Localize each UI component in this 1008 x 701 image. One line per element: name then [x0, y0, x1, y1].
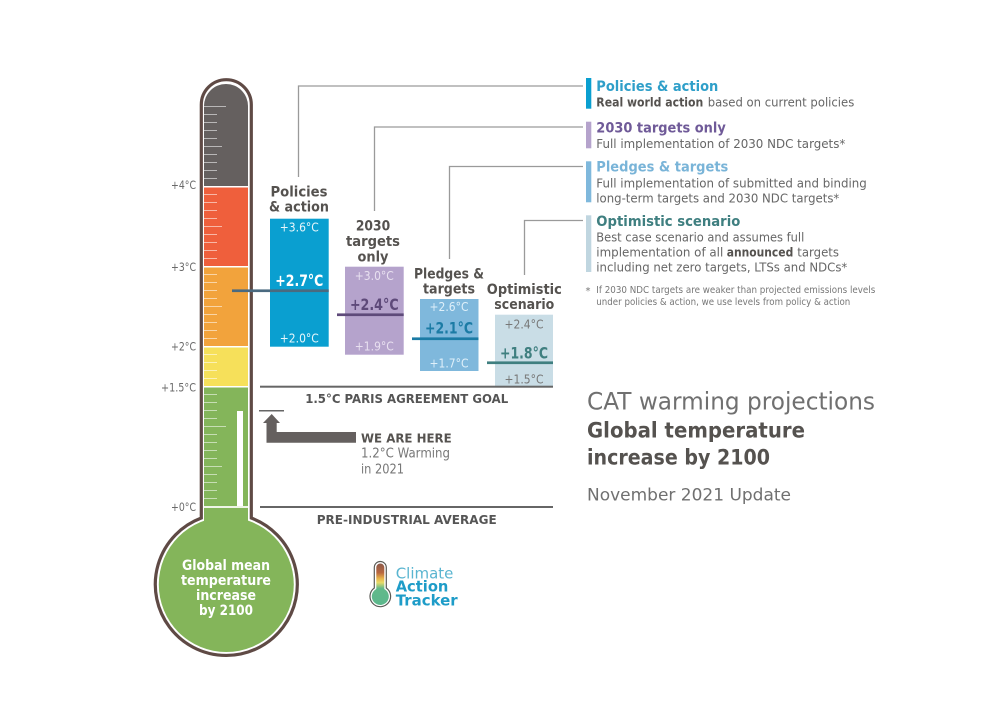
footnote: *	[586, 286, 590, 297]
scale labels: +3°C	[171, 260, 196, 274]
legend: pledges and targets	[586, 160, 867, 205]
legend: optimistic scenario: Best case scenario and assumes full	[596, 230, 804, 245]
legend: policies and action	[586, 78, 854, 110]
label	[487, 282, 562, 313]
range box	[270, 219, 329, 347]
legend: 2030 targets only	[586, 121, 845, 151]
scenario: optimistic	[487, 282, 562, 387]
label: targets	[346, 234, 400, 250]
we are here marker: in 2021	[361, 462, 404, 477]
scenario: pledges and targets: +1.7°C	[430, 355, 469, 370]
label: 2030	[356, 219, 390, 235]
logo text: Climate	[396, 564, 453, 582]
marker line	[232, 289, 329, 292]
scenario: 2030 targets only: +1.9°C	[355, 338, 394, 353]
scale labels	[161, 178, 196, 514]
bulb label: by 2100	[199, 603, 253, 619]
title block: Global temperature	[587, 418, 805, 442]
legend: optimistic scenario: implementation of all	[596, 245, 723, 260]
label: only	[358, 249, 389, 265]
label	[414, 266, 484, 297]
bulb label: Global mean	[182, 558, 270, 574]
legend: optimistic scenario	[586, 214, 847, 275]
label	[269, 185, 329, 215]
range box	[495, 315, 553, 387]
we are here marker	[259, 410, 452, 477]
legend: optimistic scenario: including net zero targets, LTSs and NDCs*	[596, 260, 847, 275]
legend: policies and action: Real world action	[596, 96, 703, 110]
logo text	[396, 564, 458, 610]
bulb label: increase	[196, 588, 256, 604]
level line	[259, 410, 284, 412]
logo text: Action	[396, 578, 448, 596]
title block: CAT warming projections	[587, 387, 875, 415]
values: +3.0°C	[355, 268, 394, 283]
values: +2.4°C	[504, 316, 544, 331]
scenario: policies and action	[232, 185, 329, 347]
pre-industrial line and label: PRE-INDUSTRIAL AVERAGE	[317, 512, 497, 527]
thermometer outline	[155, 80, 297, 655]
legend: optimistic scenario: targets	[797, 245, 839, 260]
range box	[420, 299, 478, 371]
label: & action	[269, 199, 329, 215]
legend: optimistic scenario: announced	[727, 246, 793, 260]
logo text: Tracker	[396, 592, 458, 610]
label: Optimistic	[487, 282, 562, 298]
legend: policies and action: based on current policies	[708, 95, 854, 110]
values: +2.0°C	[280, 330, 319, 345]
values: +2.6°C	[430, 299, 469, 314]
footnote: under policies & action, we use levels from policy & action	[596, 297, 850, 308]
marker line	[337, 313, 404, 316]
legend: pledges and targets: Full implementation of submitted and binding	[596, 175, 867, 190]
legend: pledges and targets: Pledges & targets	[596, 160, 728, 176]
logo: Climate Action Tracker	[370, 562, 458, 610]
label	[346, 219, 400, 265]
scale labels: +2°C	[171, 340, 196, 354]
legend: 2030 targets only: Full implementation of 2030 NDC targets*	[596, 136, 845, 151]
temperature colour bands	[204, 80, 248, 530]
scenario: pledges and targets	[412, 266, 484, 371]
connector lines	[298, 86, 583, 275]
marker line	[487, 361, 553, 364]
legend: policies and action: Policies & action	[596, 79, 718, 95]
label: Policies	[270, 185, 328, 201]
scale labels: +4°C	[171, 178, 196, 192]
zero line	[204, 506, 248, 508]
label: Pledges &	[414, 266, 484, 282]
arrow	[263, 414, 356, 443]
scenario: optimistic: +1.8°C	[500, 343, 548, 362]
text: WE ARE HERE	[361, 430, 452, 445]
bulb label	[181, 558, 271, 619]
footnote	[586, 285, 875, 308]
current warming bar	[237, 411, 243, 507]
Paris goal line and label: 1.5°C PARIS AGREEMENT GOAL	[305, 391, 508, 406]
legend: optimistic scenario: Optimistic scenario	[596, 214, 740, 230]
marker line	[412, 337, 478, 340]
we are here marker: 1.2°C Warming	[361, 447, 450, 462]
bulb label: temperature	[181, 573, 271, 589]
label: scenario	[494, 297, 554, 313]
scenario: 2030 targets only	[337, 219, 404, 355]
label: targets	[423, 281, 475, 297]
scale ticks	[204, 106, 226, 498]
bulb fill	[159, 517, 294, 652]
scenario: optimistic: +1.5°C	[504, 371, 544, 386]
title block: increase by 2100	[587, 446, 770, 470]
title block: November 2021 Update	[587, 486, 791, 506]
legend: pledges and targets: long-term targets and 2030 NDC targets*	[596, 190, 839, 205]
range box	[345, 267, 404, 355]
legend: 2030 targets only: 2030 targets only	[596, 121, 726, 137]
scenario: 2030 targets only: +2.4°C	[350, 295, 399, 314]
icon: logo thermometer	[370, 562, 391, 607]
thermometer	[155, 80, 297, 655]
scenario: pledges and targets: +2.1°C	[425, 318, 473, 337]
scale labels: +1.5°C	[161, 380, 196, 394]
values: +3.6°C	[280, 220, 319, 235]
title block	[587, 387, 875, 506]
values	[275, 220, 323, 345]
scale labels: +0°C	[171, 500, 196, 514]
values: +2.7°C	[275, 271, 323, 290]
footnote: If 2030 NDC targets are weaker than projected emissions levels	[596, 285, 875, 296]
